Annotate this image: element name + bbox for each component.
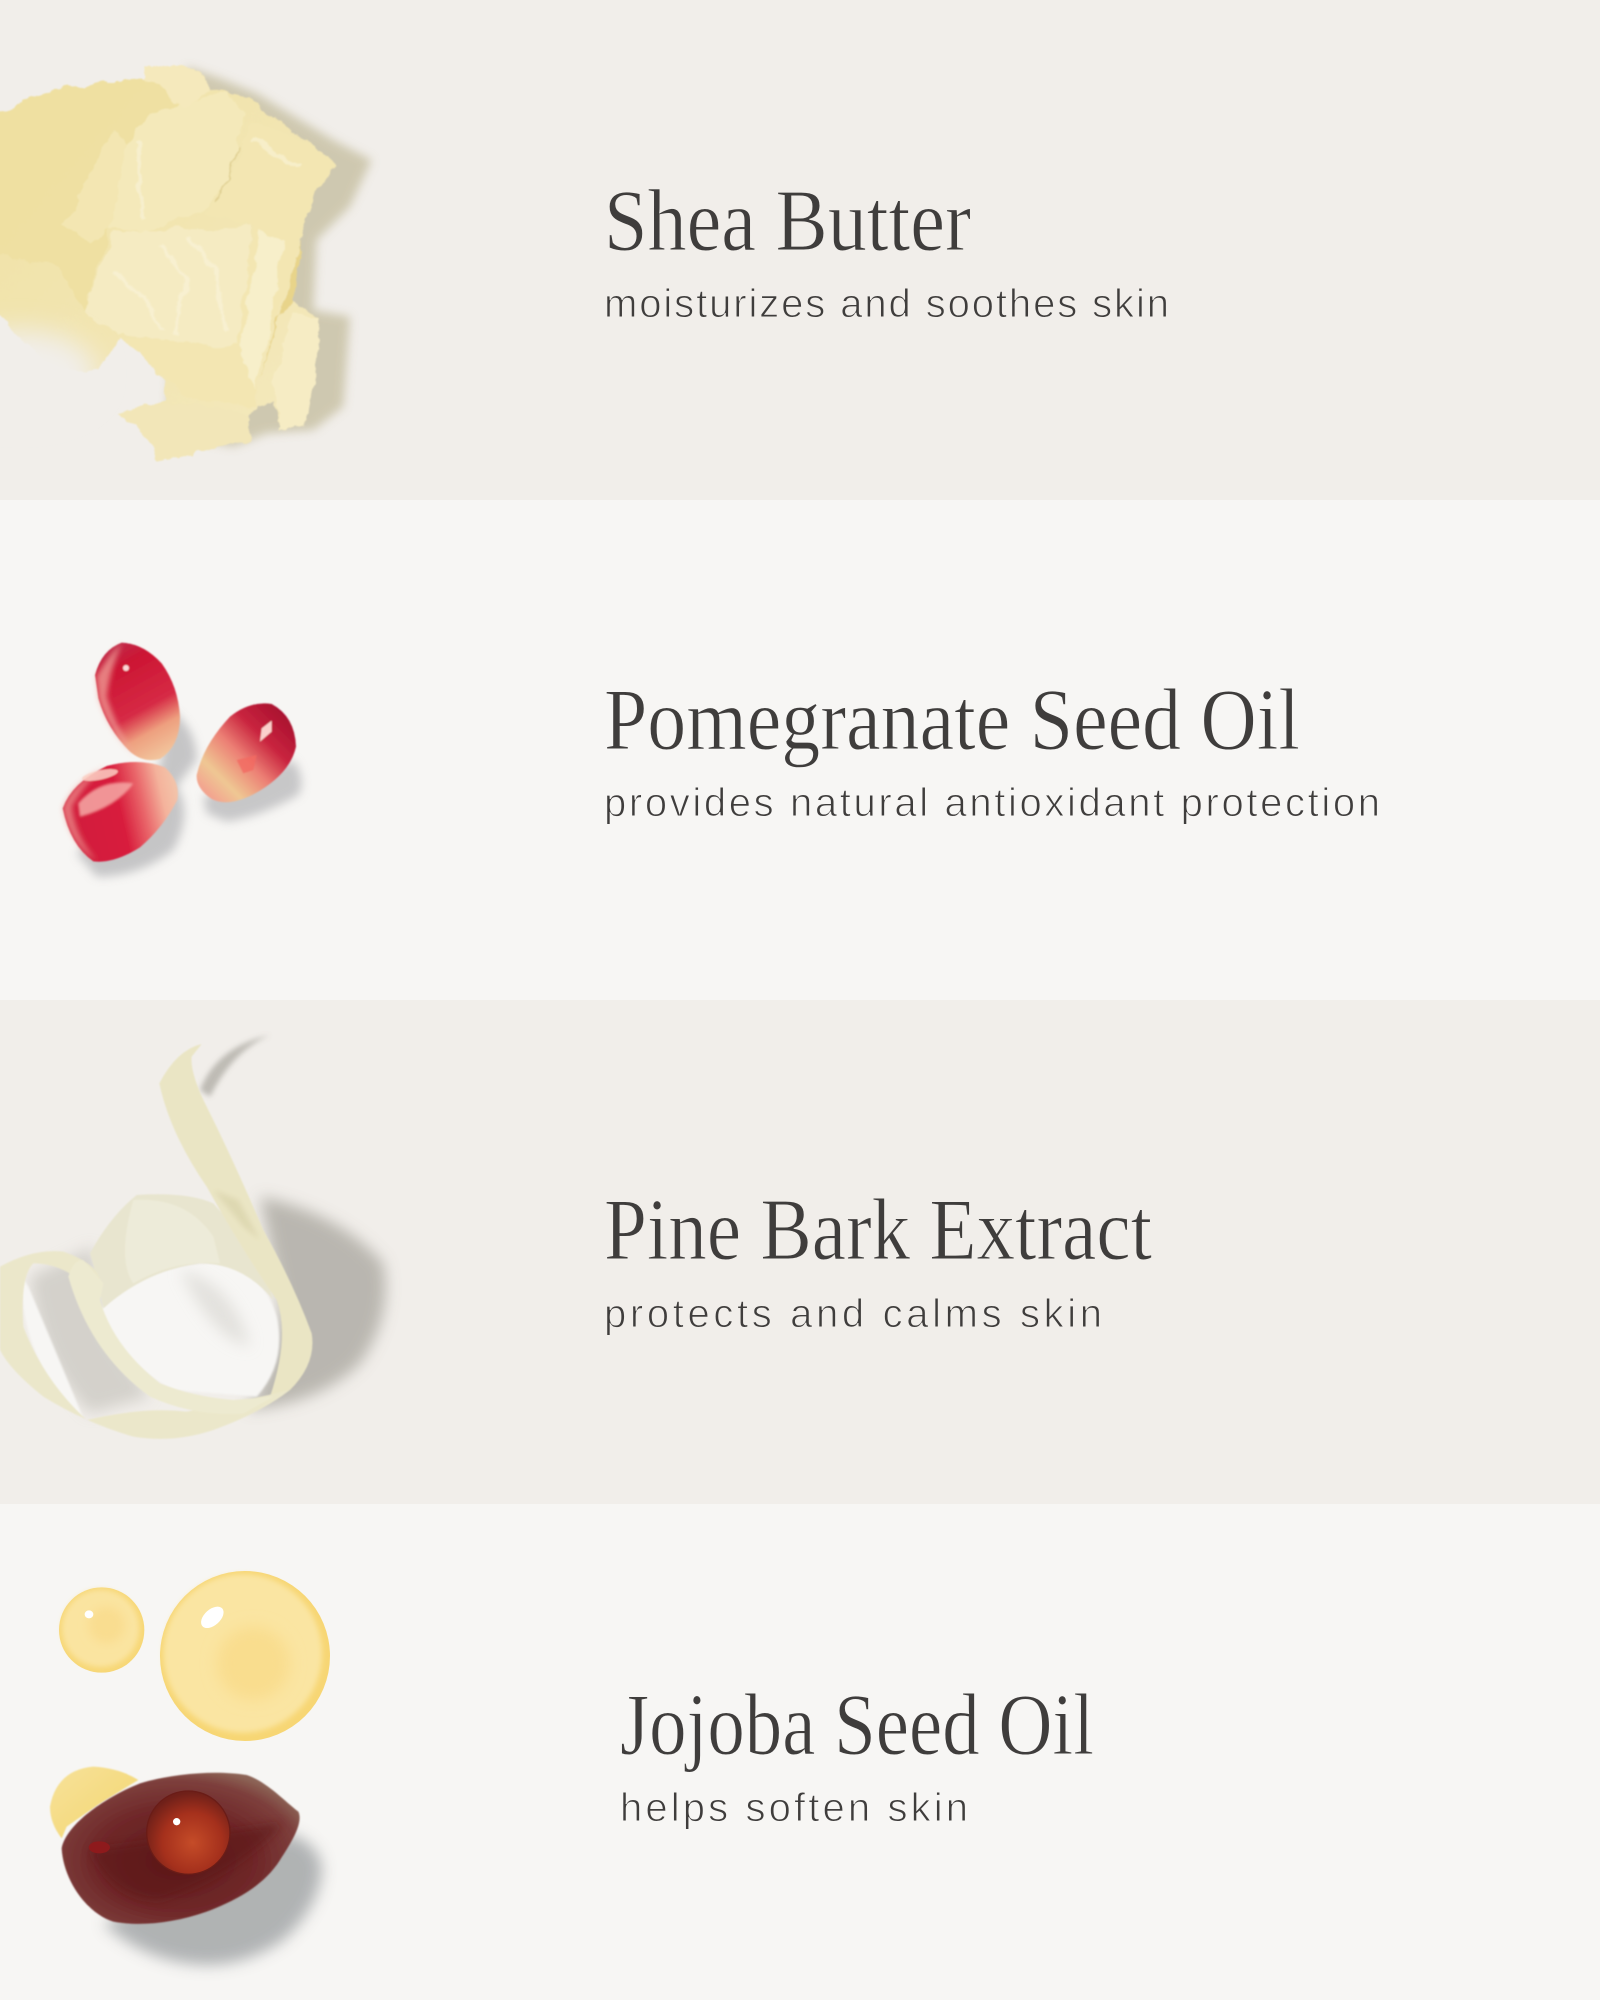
icon: shea butter swatch xyxy=(0,65,372,462)
icon: pomegranate arils xyxy=(63,643,302,877)
panel: pine bark extract xyxy=(0,1000,1600,1504)
heading: Pomegranate Seed Oil xyxy=(604,672,1300,769)
icon: pine bark curl xyxy=(0,1035,386,1439)
heading: Pine Bark Extract xyxy=(604,1182,1152,1279)
description: helps soften skin xyxy=(620,1786,968,1830)
panel: jojoba seed oil xyxy=(0,1504,1600,2000)
panel background xyxy=(0,500,1600,1000)
panel background xyxy=(0,0,1600,500)
description: moisturizes and soothes skin xyxy=(604,282,1169,326)
panel: pomegranate seed oil xyxy=(0,500,1600,1000)
panel background xyxy=(0,1504,1600,2000)
seed xyxy=(62,1773,300,1924)
heading: Shea Butter xyxy=(604,173,971,270)
small oil drop xyxy=(59,1587,144,1673)
panel background xyxy=(0,1000,1600,1504)
icon: jojoba seed with oil drops xyxy=(50,1571,330,1965)
large oil drop xyxy=(160,1571,330,1741)
panel: shea butter xyxy=(0,0,1600,500)
description: provides natural antioxidant protection xyxy=(604,781,1380,825)
description: protects and calms skin xyxy=(604,1292,1102,1336)
oil bead on seed xyxy=(147,1791,230,1874)
oil pool behind seed xyxy=(50,1767,138,1838)
heading: Jojoba Seed Oil xyxy=(620,1677,1094,1774)
